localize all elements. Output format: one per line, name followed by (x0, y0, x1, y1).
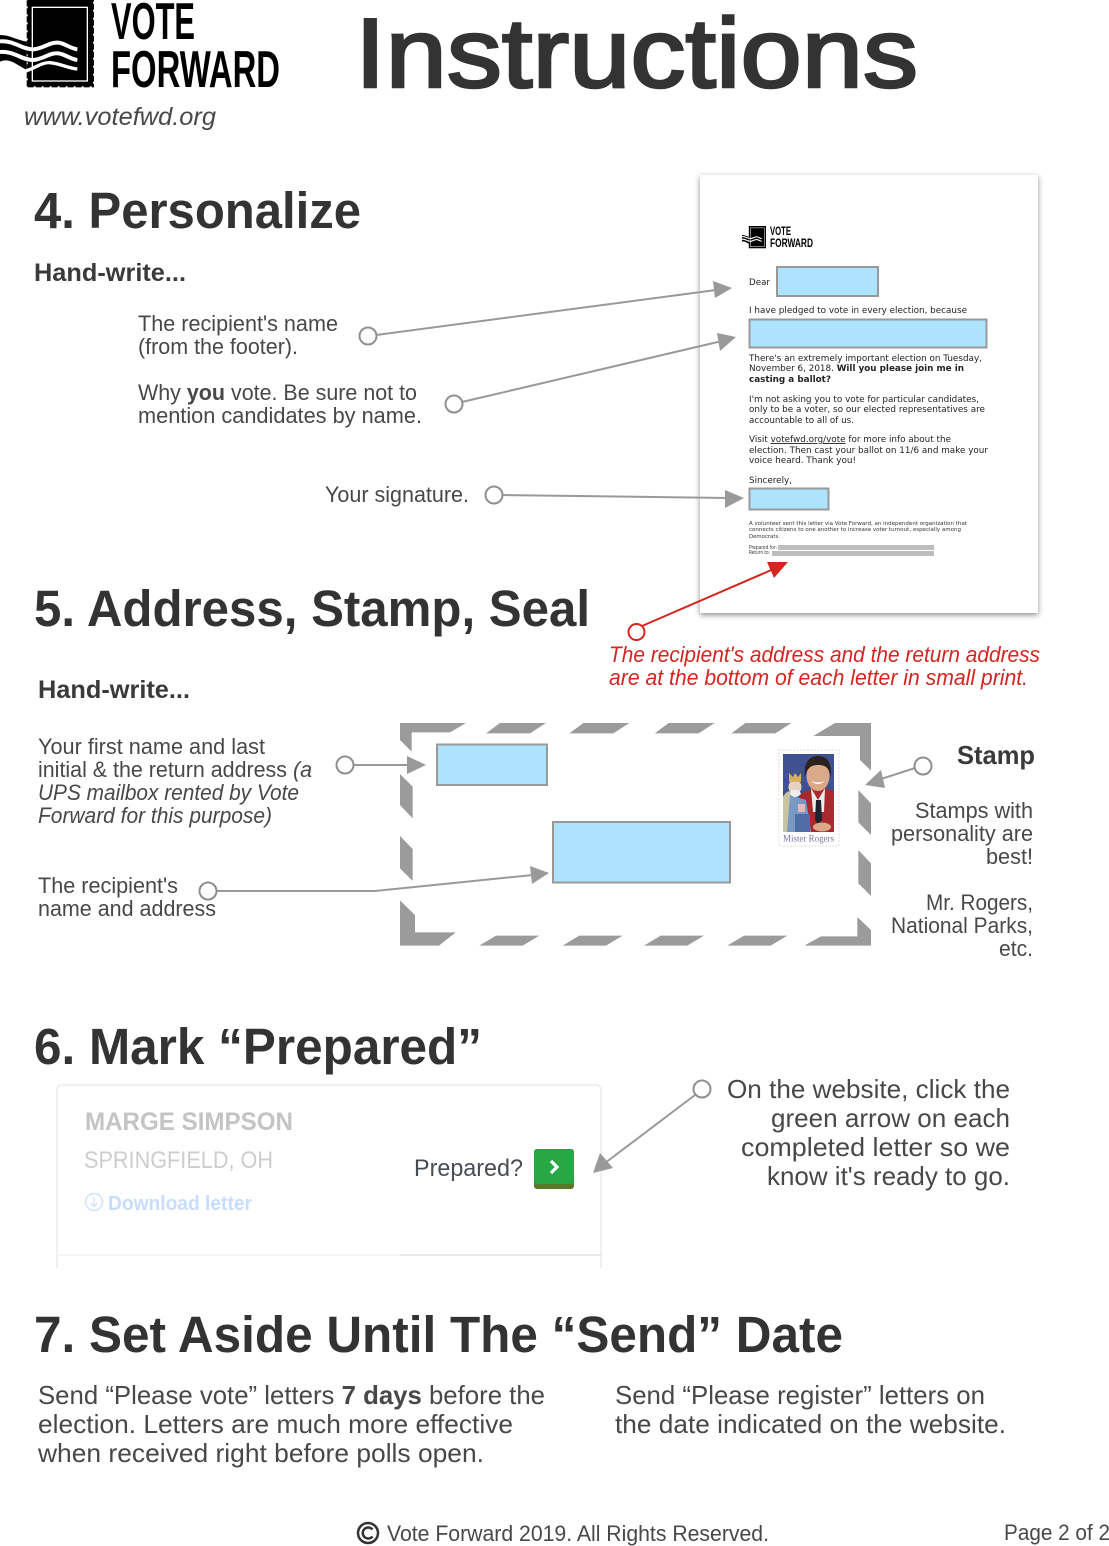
logo: Vote Forward (0, 0, 280, 99)
subheading: hand-write step 4: Hand-write... (34, 259, 186, 287)
text: stamp advice (891, 798, 1033, 961)
green arrow button (534, 1149, 574, 1189)
letter text: I have pledged to vote in every election, because (749, 306, 967, 316)
text: stamp advice: National Parks, (891, 913, 1033, 938)
text: return address (38, 734, 312, 828)
arrow: why to letter (446, 333, 736, 412)
text: website instructions: On the website, click the (727, 1074, 1010, 1104)
letter text: There's an extremely important election on Tuesday, (748, 354, 982, 364)
text: website instructions: know it's ready to go. (767, 1161, 1010, 1191)
panel: website card (57, 1085, 601, 1268)
text: please register letters (615, 1380, 1006, 1439)
logo: Vote Forward: FORWARD (111, 41, 280, 99)
subheading: hand-write step 5: Hand-write... (38, 676, 190, 704)
text: please vote letters (37, 1380, 545, 1468)
letter text: casting a ballot? (749, 375, 831, 385)
text: why you vote: Why you vote. Be sure not to (138, 380, 417, 405)
stamp heading: Stamp (957, 740, 1035, 770)
letter text: I'm not asking you to vote for particular candidates, (749, 395, 979, 405)
text: return address: Your first name and last (38, 734, 265, 759)
download link: Download letter (108, 1193, 252, 1215)
recipient name: MARGE SIMPSON (85, 1108, 293, 1136)
fill-in box: why you vote (750, 320, 986, 348)
text: recipient address: name and address (38, 896, 216, 921)
text: recipient address: The recipient's (38, 873, 178, 898)
icon: letter logo (742, 224, 813, 250)
icon: letter logo: FORWARD (770, 236, 813, 250)
arrow: recipient address (200, 866, 549, 900)
letter text: accountable to all of us. (749, 416, 854, 426)
letter text: Dear (749, 278, 770, 288)
letter text: Sincerely, (749, 476, 792, 486)
letter text: Visit votefwd.org/vote for more info about the (749, 435, 951, 445)
arrow: stamp (865, 758, 932, 788)
text: please vote letters: when received right before polls open. (37, 1438, 484, 1468)
letter text: election. Then cast your ballot on 11/6 and make your (749, 446, 988, 456)
text: stamp advice: Stamps with (915, 798, 1033, 823)
arrow: name to letter (360, 281, 732, 344)
fill-in box: signature (750, 488, 828, 510)
fill-in box: return address (437, 744, 547, 785)
arrow: prepared (593, 1080, 710, 1173)
text: website instructions: green arrow on each (771, 1103, 1010, 1133)
stamp: Mister Rogers: Mister Rogers (783, 834, 834, 844)
heading: step 5: 5. Address, Stamp, Seal (34, 580, 590, 637)
redacted footer addresses (772, 545, 934, 556)
icon: letter logo: VOTE (770, 224, 791, 238)
heading: step 7: 7. Set Aside Until The “Send” Date (34, 1306, 843, 1363)
letter text: A volunteer sent this letter via Vote Forward, an independent organization that (749, 521, 967, 527)
arrow: return address (336, 756, 426, 774)
footer: copyright: Vote Forward 2019. All Rights Reserved. (387, 1521, 769, 1546)
text: return address: initial & the return address (a (38, 757, 312, 782)
text: your signature: Your signature. (325, 482, 469, 507)
red note: The recipient's address and the return address (609, 642, 1040, 667)
title: Instructions (355, 0, 918, 108)
arrow: red address pointer (628, 562, 788, 640)
heading: step 4: 4. Personalize (34, 182, 361, 239)
letter text: Return to: (749, 550, 770, 556)
arrow: signature to letter (486, 486, 744, 508)
fill-in box: recipient name (777, 267, 878, 296)
airmail border (400, 723, 871, 946)
text: please vote letters: election. Letters are much more effective (38, 1409, 513, 1439)
envelope (400, 723, 871, 946)
red note (609, 642, 1040, 690)
text: recipient name: (from the footer). (138, 334, 298, 359)
text: recipient address (38, 873, 216, 921)
letter text: only to be a voter, so our elected representatives are (749, 405, 985, 415)
website url: www.votefwd.org (24, 103, 216, 131)
letter text: voice heard. Thank you! (749, 456, 856, 466)
text: please register letters: the date indicated on the website. (615, 1409, 1006, 1439)
recipient city: SPRINGFIELD, OH (84, 1147, 273, 1174)
text: website instructions (727, 1074, 1010, 1191)
letter text: November 6, 2018. Will you please join me in (749, 364, 964, 374)
text: return address: UPS mailbox rented by Vote (38, 780, 299, 805)
text: stamp advice: best! (986, 844, 1033, 869)
letter text: Democrats. (749, 534, 780, 540)
letter text: connects citizens to one another to increase voter turnout, especially among (749, 527, 961, 533)
stamp: Mister Rogers (779, 750, 839, 846)
prepared label: Prepared? (414, 1155, 523, 1182)
text: stamp advice: Mr. Rogers, (926, 890, 1033, 915)
text: website instructions: completed letter so we (741, 1132, 1010, 1162)
text: stamp advice: personality are (891, 821, 1033, 846)
text: recipient name: The recipient's name (138, 311, 338, 336)
text: why you vote (138, 380, 422, 428)
letter text (748, 278, 988, 556)
text: recipient name (138, 311, 338, 359)
heading: step 6: 6. Mark “Prepared” (34, 1018, 482, 1075)
text: please register letters: Send “Please register” letters on (615, 1380, 985, 1410)
panel: sample letter (700, 175, 1038, 613)
red note: are at the bottom of each letter in small print. (609, 665, 1028, 690)
text: why you vote: mention candidates by name. (138, 403, 422, 428)
text: return address: Forward for this purpose) (38, 803, 272, 828)
fill-in box: recipient address (553, 822, 730, 882)
text: stamp advice: etc. (999, 936, 1033, 961)
text: please vote letters: Send “Please vote” letters 7 days before the (38, 1380, 545, 1410)
letter text: Prepared for: (749, 545, 777, 551)
